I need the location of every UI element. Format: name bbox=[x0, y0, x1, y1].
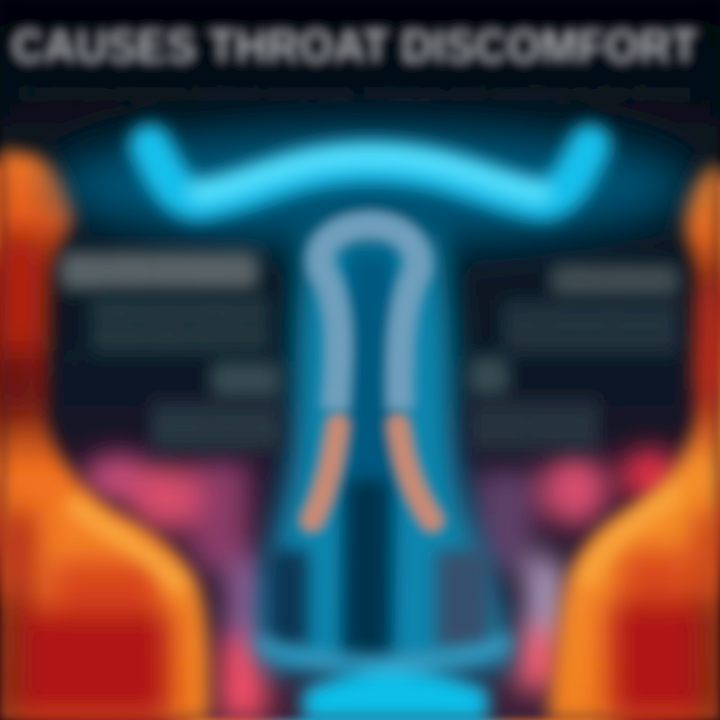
text block: left lower heading bbox=[212, 362, 280, 398]
bottom edge base bbox=[0, 694, 720, 720]
right edge base bbox=[694, 0, 720, 720]
right flame: highlight bbox=[585, 490, 680, 585]
text block: left heading: Dry Air Irritants bbox=[62, 256, 257, 286]
text block: left lower body bbox=[150, 402, 280, 452]
left edge base bbox=[0, 0, 26, 720]
text block: left body: delicate lining of the throat bbox=[92, 327, 268, 344]
left flame: highlight bbox=[70, 500, 182, 590]
subtitle: Common triggers behind soreness, irritation and swelling in the throat bbox=[20, 83, 690, 105]
throat: bottom cyan pool bbox=[258, 640, 510, 720]
text block: left lower body: Stomach acid rising bbox=[152, 419, 277, 435]
right flame: dark edge bbox=[706, 600, 720, 720]
throat diagram bbox=[258, 225, 510, 720]
text block: left body: Smoke and dust inflame the bbox=[92, 305, 267, 322]
text block: right body: Viruses and bacteria swell tissue bbox=[504, 317, 674, 334]
throat: dark recesses bbox=[268, 550, 490, 650]
text block: right lower body: Overuse of the voice bbox=[472, 417, 597, 433]
throat: central channel bbox=[340, 250, 398, 680]
title: CAUSES THROAT DISCOMFORT bbox=[12, 20, 698, 72]
throat: outer walls bbox=[260, 235, 510, 670]
wave glow backdrop bbox=[50, 125, 690, 245]
throat: arch lining bbox=[320, 225, 418, 410]
text block: left body bbox=[90, 294, 270, 354]
text block: right body bbox=[502, 300, 678, 354]
left flame: red core bbox=[0, 240, 170, 720]
throat: inflamed strips bbox=[312, 425, 432, 520]
panel: left flame bbox=[0, 150, 209, 720]
text block: right lower body bbox=[470, 400, 600, 452]
panel: right flame bbox=[548, 160, 720, 720]
text block: right lower heading bbox=[470, 356, 508, 396]
text block: left lower heading: Reflux bbox=[214, 368, 277, 393]
text block: right lower heading: Use bbox=[472, 366, 506, 391]
wave: cyan airflow band bbox=[150, 145, 590, 200]
text block: right heading: Infections bbox=[552, 269, 678, 296]
right flame: red core bbox=[610, 290, 720, 720]
pink haze: lower background bbox=[82, 449, 680, 720]
left flame: dark edge bbox=[0, 600, 14, 720]
